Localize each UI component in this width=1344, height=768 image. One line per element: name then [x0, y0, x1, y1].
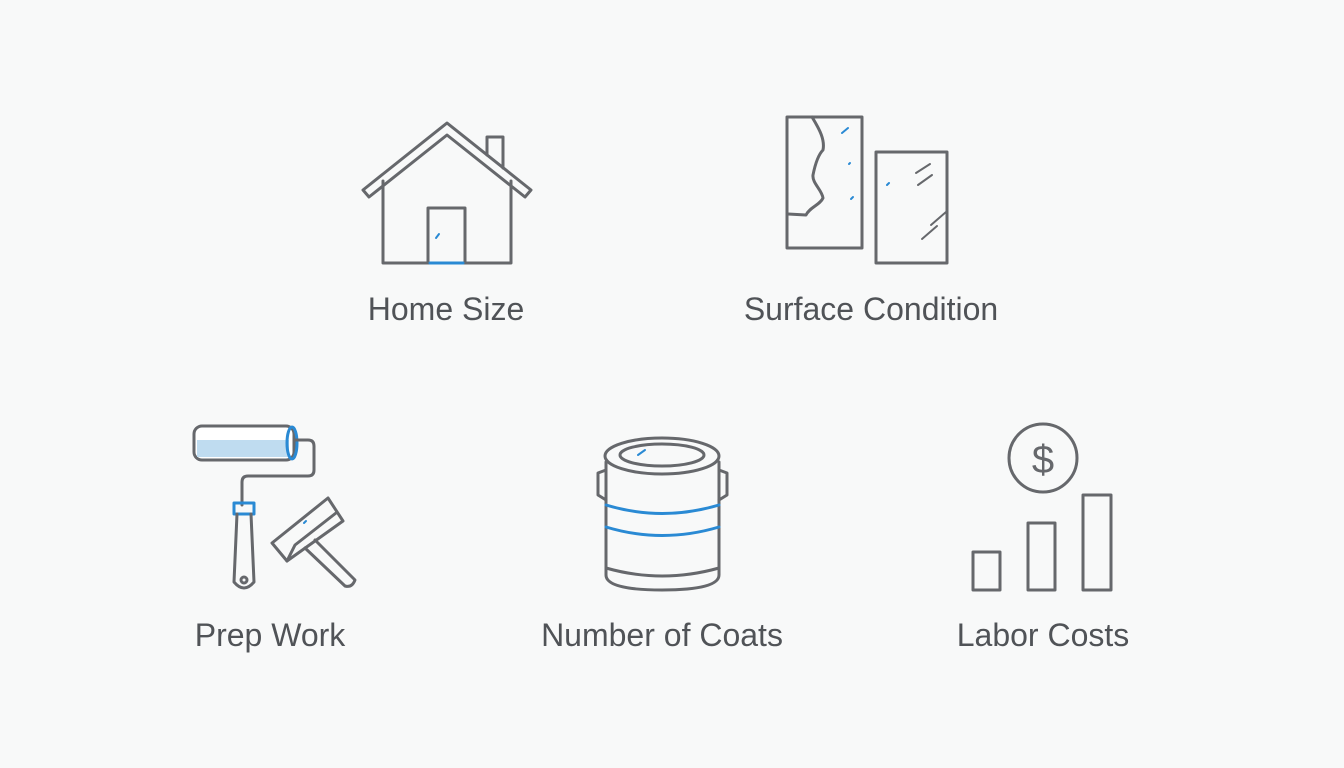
label: Labor Costs: Labor Costs — [957, 617, 1129, 653]
label: Surface Condition: Surface Condition — [744, 291, 998, 327]
label: Number of Coats: Number of Coats — [541, 617, 783, 653]
label: Prep Work: Prep Work — [195, 617, 345, 653]
icon: paint can — [598, 438, 727, 590]
icon: roller and scraper — [194, 426, 355, 588]
icon: labor costs chart: $ — [1032, 438, 1054, 482]
icon: labor costs chart — [973, 424, 1111, 590]
label: Home Size: Home Size — [368, 291, 524, 327]
icon: surface panels — [787, 117, 947, 263]
icon: house — [363, 123, 531, 263]
